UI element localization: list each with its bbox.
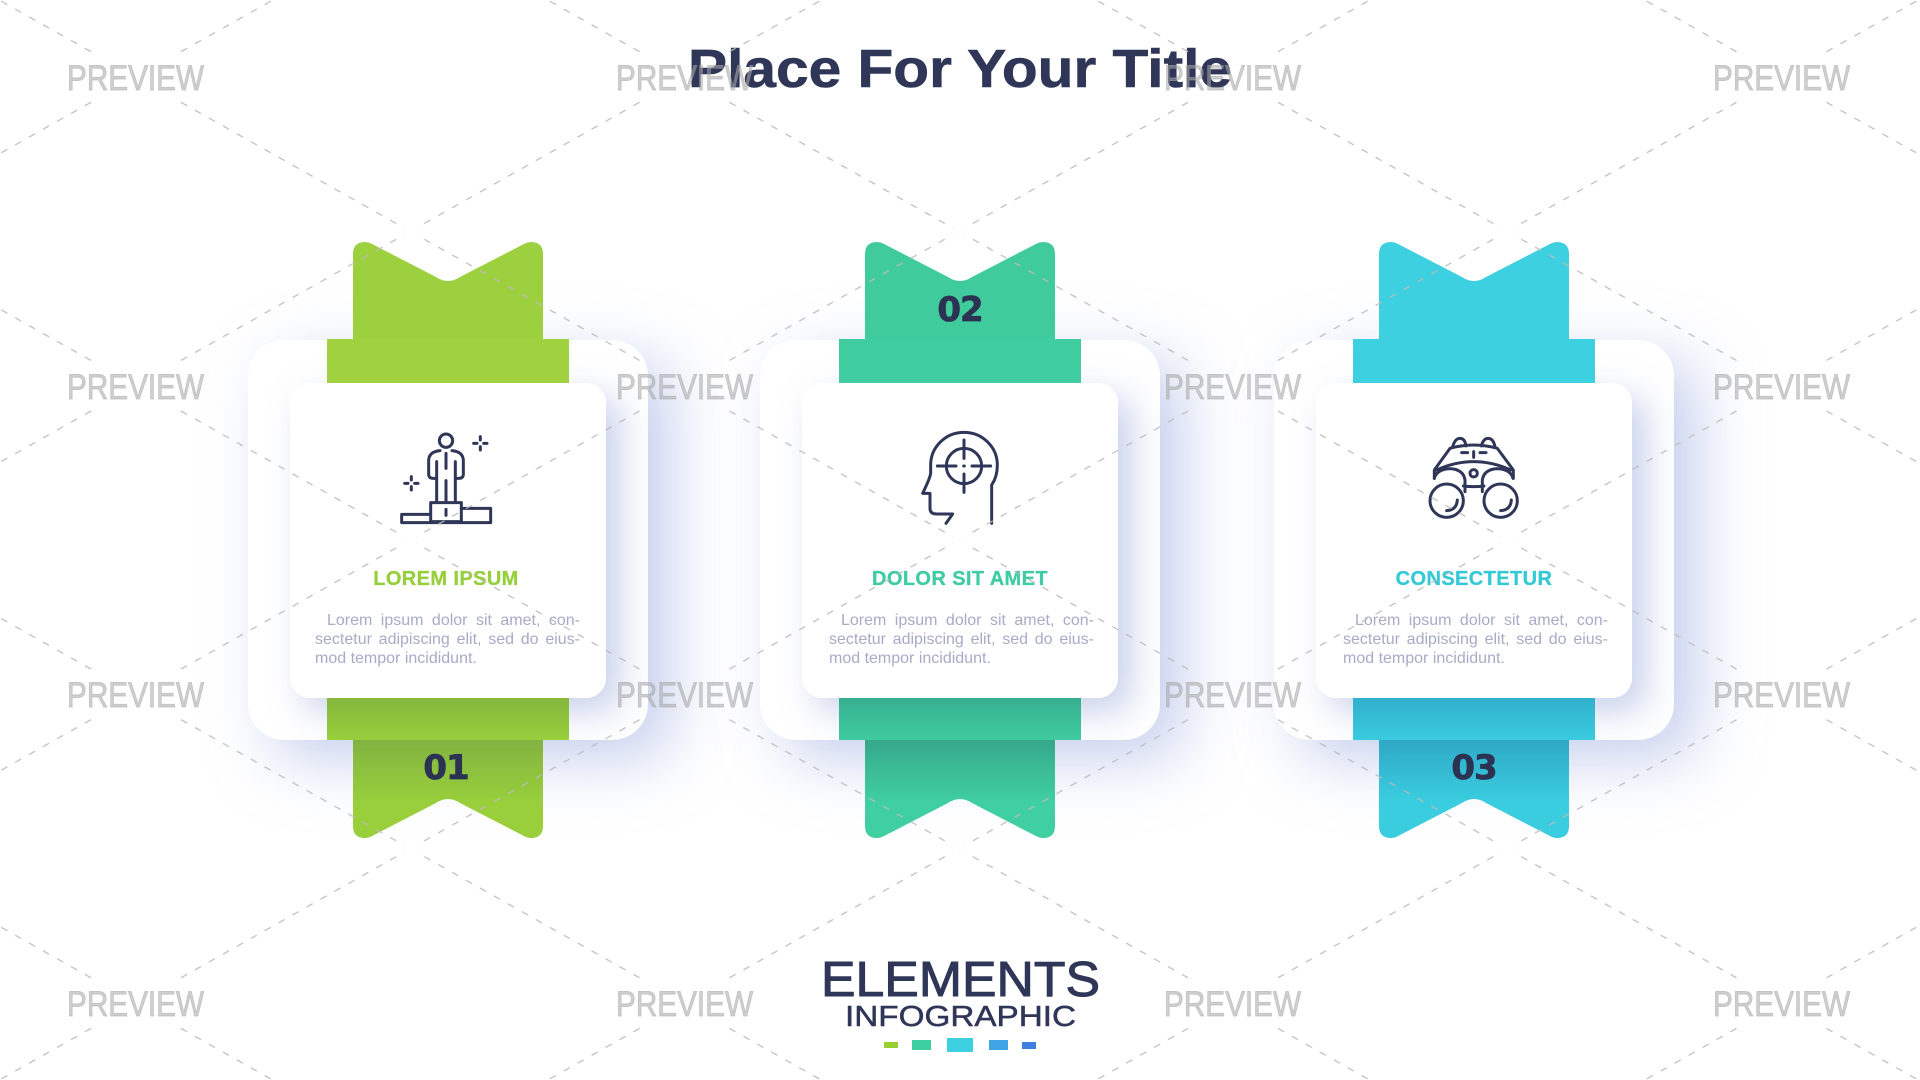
body text: Lorem ipsum dolor sit amet, con- (841, 612, 1094, 629)
heading: DOLOR SIT AMET (872, 568, 1048, 590)
body text: mod tempor incididunt. (829, 650, 991, 667)
inner card shadow (802, 383, 1118, 698)
number 01: 01 (423, 748, 469, 788)
ribbon band top (1353, 339, 1595, 384)
body text: sectetur adipiscing elit, sed do eius- (315, 631, 580, 648)
watermark overlay: PREVIEW (616, 368, 753, 407)
ribbon band bottom (839, 697, 1081, 740)
body text: Lorem ipsum dolor sit amet, con- (1355, 612, 1608, 629)
content card (802, 383, 1118, 698)
card backing (1274, 340, 1674, 740)
body text (315, 612, 580, 667)
watermark overlay: PREVIEW (1713, 59, 1850, 98)
watermark overlay: PREVIEW (616, 985, 753, 1024)
ribbon band bottom (1353, 697, 1595, 740)
inner card shadow (290, 383, 606, 698)
icon: person on podium (400, 432, 492, 524)
number 03: 03 (1451, 748, 1497, 788)
ribbon band top (839, 339, 1081, 384)
body text: Lorem ipsum dolor sit amet, con- (327, 612, 580, 629)
heading: LOREM IPSUM (373, 568, 519, 590)
content card (290, 383, 606, 698)
colour swatches (884, 1038, 1036, 1052)
watermark overlay: PREVIEW (1713, 368, 1850, 407)
watermark overlay: PREVIEW (1164, 985, 1301, 1024)
panel: step 01 lorem ipsum (241, 242, 703, 838)
body text (829, 612, 1094, 667)
watermark overlay: PREVIEW (616, 59, 753, 98)
number 02: 02 (937, 290, 983, 330)
body text: mod tempor incididunt. (1343, 650, 1505, 667)
ribbon tails (1379, 242, 1569, 838)
ribbon tails (865, 242, 1055, 838)
watermark overlay: PREVIEW (67, 985, 204, 1024)
card backing (760, 340, 1160, 740)
logo wordmark: ELEMENTS (821, 953, 1100, 1007)
body text: mod tempor incididunt. (315, 650, 477, 667)
panel: step 03 consectetur (1267, 242, 1729, 838)
watermark overlay: PREVIEW (616, 676, 753, 715)
body text: sectetur adipiscing elit, sed do eius- (829, 631, 1094, 648)
watermark overlay: PREVIEW (67, 676, 204, 715)
ribbon tails (353, 242, 543, 838)
icon: head with target (921, 430, 999, 525)
content card (1316, 383, 1632, 698)
watermark overlay: PREVIEW (67, 368, 204, 407)
ribbon band top (327, 339, 569, 384)
footer logo (821, 953, 1100, 1052)
watermark overlay: PREVIEW (1164, 59, 1301, 98)
logo wordmark (821, 953, 1100, 1030)
watermark overlay: PREVIEW (1164, 676, 1301, 715)
watermark overlay: PREVIEW (67, 59, 204, 98)
title: Place For Your Title (688, 39, 1232, 99)
ribbon band bottom (327, 697, 569, 740)
body text (1343, 612, 1608, 667)
watermark overlay: PREVIEW (1713, 676, 1850, 715)
panel: step 02 dolor sit amet (753, 242, 1215, 838)
watermark overlay: PREVIEW (1164, 368, 1301, 407)
inner card shadow (1316, 383, 1632, 698)
heading: CONSECTETUR (1396, 568, 1552, 590)
card backing (248, 340, 648, 740)
body text: sectetur adipiscing elit, sed do eius- (1343, 631, 1608, 648)
watermark overlay: PREVIEW (1713, 985, 1850, 1024)
icon: binoculars (1428, 436, 1519, 519)
